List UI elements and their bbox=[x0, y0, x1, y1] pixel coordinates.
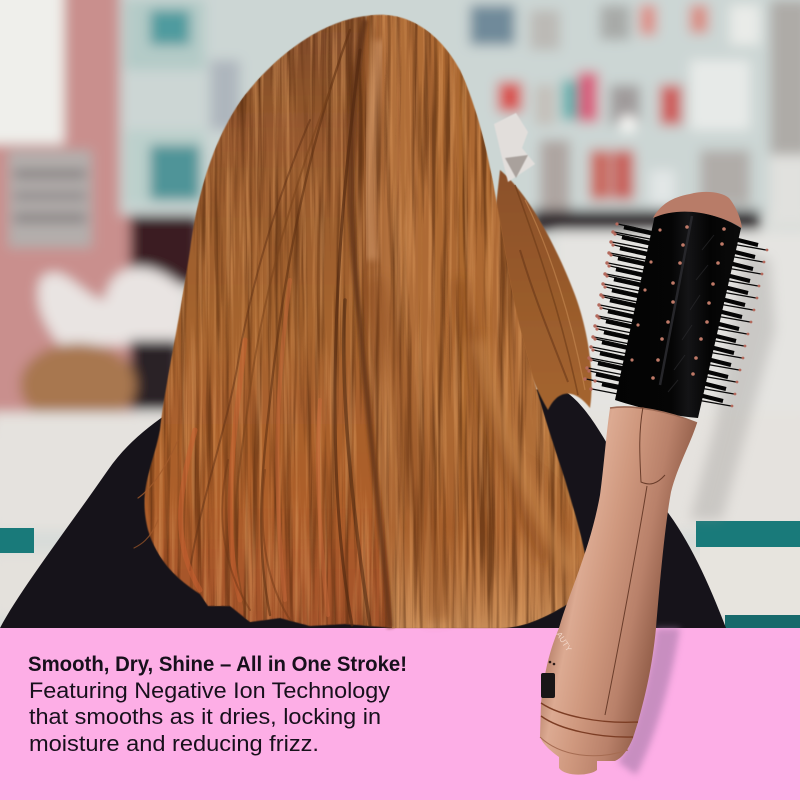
panel background: pink bbox=[0, 628, 800, 800]
barrel pink pins bbox=[630, 225, 726, 380]
ponytail section bbox=[490, 170, 592, 410]
teal band left bbox=[0, 528, 34, 553]
caption text bbox=[28, 653, 407, 756]
cast shadow on counter bbox=[690, 250, 775, 520]
caption line 3: moisture and reducing frizz. bbox=[29, 731, 319, 756]
switch bbox=[541, 673, 555, 698]
hair bbox=[134, 10, 600, 630]
caption heading: Smooth, Dry, Shine – All in One Stroke! bbox=[28, 653, 407, 676]
ponytail strands bbox=[515, 185, 585, 395]
left strands bbox=[134, 30, 370, 625]
hair clip bbox=[494, 113, 535, 182]
handle brand text: AUTY bbox=[554, 630, 574, 654]
handle body bbox=[540, 407, 697, 775]
cape bbox=[0, 388, 726, 628]
soft shadow on pink bbox=[618, 628, 680, 775]
handle seam bbox=[605, 407, 665, 715]
hair dryer brush bbox=[540, 192, 775, 775]
brush end cap bbox=[653, 192, 742, 228]
barrel ridges bbox=[668, 235, 714, 392]
right highlight band bbox=[369, 40, 380, 260]
hair strand texture bbox=[140, 10, 600, 630]
teal band right bbox=[696, 521, 800, 547]
brush barrel bbox=[615, 211, 741, 418]
indicator dots bbox=[549, 661, 555, 665]
right section bbox=[359, 15, 588, 628]
caption line 2: that smooths as it dries, locking in bbox=[29, 704, 381, 729]
lower strands sheen bbox=[385, 427, 588, 628]
brush bristles bbox=[583, 222, 768, 407]
handle base bands bbox=[541, 703, 638, 737]
caption line 1: Featuring Negative Ion Technology bbox=[29, 678, 390, 703]
handle collar edge bbox=[610, 407, 697, 423]
central dark part shadow bbox=[351, 20, 390, 628]
background: blurred salon photo bbox=[0, 0, 800, 630]
left section bbox=[145, 16, 400, 628]
